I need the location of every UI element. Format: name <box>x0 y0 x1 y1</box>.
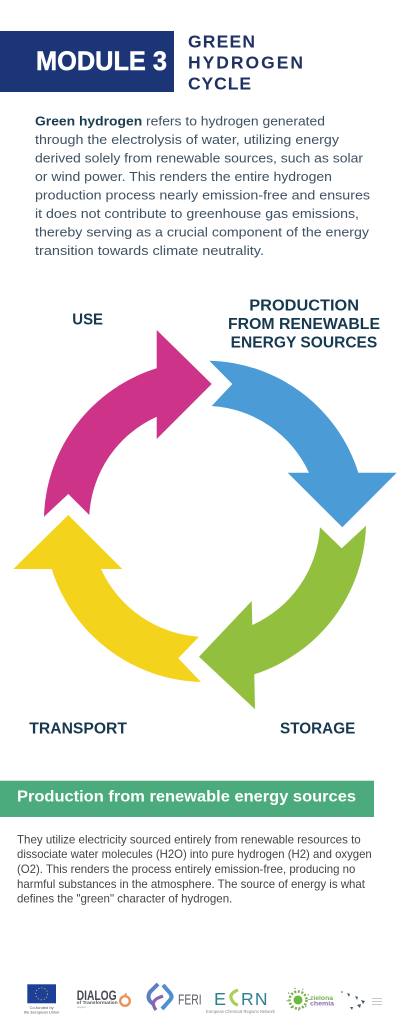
logo: Dialog of Transformation: DIALOG <box>77 987 117 1003</box>
arrow: transport (yellow) <box>13 515 201 682</box>
logo: ECRN: European Chemical Regions Network <box>206 1009 276 1014</box>
section text block: They utilize electricity sourced entirely from renewable resources to <box>17 832 361 846</box>
section text block: dissociate water molecules (H2O) into pure hydrogen (H2) and oxygen <box>17 847 372 861</box>
logo: EU co-funded <box>24 984 59 1014</box>
section text block <box>17 832 372 906</box>
logo: ECRN: E <box>214 989 226 1009</box>
logo: FERI <box>148 984 202 1010</box>
module banner: MODULE 3 <box>36 46 167 76</box>
logo: EU co-funded: Co-funded by <box>30 1005 54 1010</box>
cycle diagram <box>13 330 397 709</box>
arrow: use (magenta) <box>44 330 212 517</box>
title <box>188 32 303 93</box>
module banner <box>0 31 174 92</box>
logo: birds <box>341 991 382 1010</box>
title: CYCLE <box>188 73 251 93</box>
label: use: USE <box>72 311 103 328</box>
intro text block: derived solely from renewable sources, such as solar <box>35 151 363 165</box>
arrow: storage (green) <box>199 526 366 709</box>
intro text block: production process nearly emission-free and ensures <box>35 188 370 202</box>
logo: ECRN: RN <box>241 989 268 1009</box>
logo: zielona chemia: zielona <box>310 995 333 1002</box>
section text block: defines the "green" character of hydrogen. <box>17 892 232 906</box>
logo: EU co-funded: the European Union <box>24 1010 59 1014</box>
intro text block: transition towards climate neutrality. <box>35 244 264 258</box>
arrow: production (blue) <box>209 361 397 527</box>
section text block: (O2). This renders the process entirely emission-free, producing no <box>17 862 356 876</box>
section banner <box>0 781 374 817</box>
section text block: harmful substances in the atmosphere. The source of energy is what <box>17 877 366 891</box>
label: production from renewable energy sources: PRODUCTION <box>249 298 359 315</box>
intro text block: it does not contribute to greenhouse gas emissions, <box>35 207 359 221</box>
label: production from renewable energy sources: FROM RENEWABLE <box>228 316 380 333</box>
intro text block: through the electrolysis of water, utilizing energy <box>35 133 340 147</box>
logo: zielona chemia <box>287 988 334 1010</box>
logo: Dialog of Transformation: of Transformation <box>77 1000 118 1005</box>
title: HYDROGEN <box>188 53 303 73</box>
intro text block: or wind power. This renders the entire hydrogen <box>35 170 332 184</box>
label: transport: TRANSPORT <box>29 720 128 737</box>
label: production from renewable energy sources: ENERGY SOURCES <box>231 335 377 352</box>
logo: zielona chemia: chemia <box>310 1000 334 1008</box>
intro text block: Green hydrogen refers to hydrogen generated <box>35 114 325 128</box>
logo: ECRN <box>206 989 276 1014</box>
logo: FERI: FERI <box>178 992 202 1008</box>
intro text block <box>35 114 370 258</box>
intro text block: thereby serving as a crucial component of the energy <box>35 225 370 239</box>
title: GREEN <box>188 32 255 52</box>
label: storage: STORAGE <box>280 720 355 737</box>
label: production from renewable energy sources <box>228 298 380 352</box>
section banner: Production from renewable energy sources <box>17 789 356 806</box>
logo: Dialog of Transformation: project <box>77 1005 86 1009</box>
